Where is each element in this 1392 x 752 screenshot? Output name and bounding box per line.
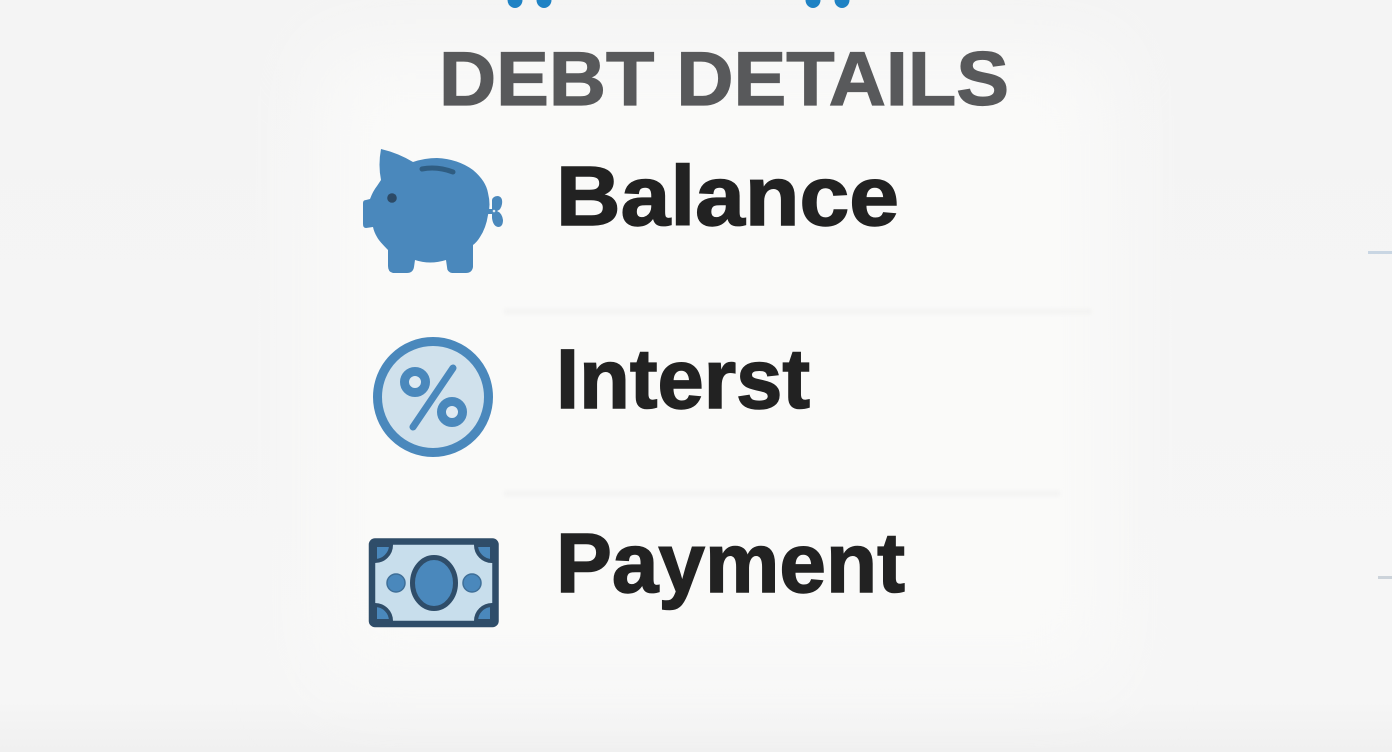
row: payment: [372, 516, 905, 624]
icon: banknote: [372, 542, 496, 624]
icon: percent badge: [378, 342, 488, 452]
top cropped blue marks, left: [508, 0, 552, 8]
right edge tick, upper: [1368, 251, 1392, 254]
top cropped blue marks, right: [806, 0, 850, 8]
row divider lines: [504, 309, 1092, 496]
title: DEBT DETAILS: [439, 37, 1009, 122]
label: interst: Interst: [556, 332, 810, 426]
row: interest: [378, 332, 810, 452]
label: payment: Payment: [556, 516, 905, 610]
right edge tick, lower: [1378, 576, 1392, 579]
label: balance: Balance: [556, 149, 899, 243]
row: balance: [363, 149, 899, 273]
icon: piggy bank: [363, 149, 503, 273]
